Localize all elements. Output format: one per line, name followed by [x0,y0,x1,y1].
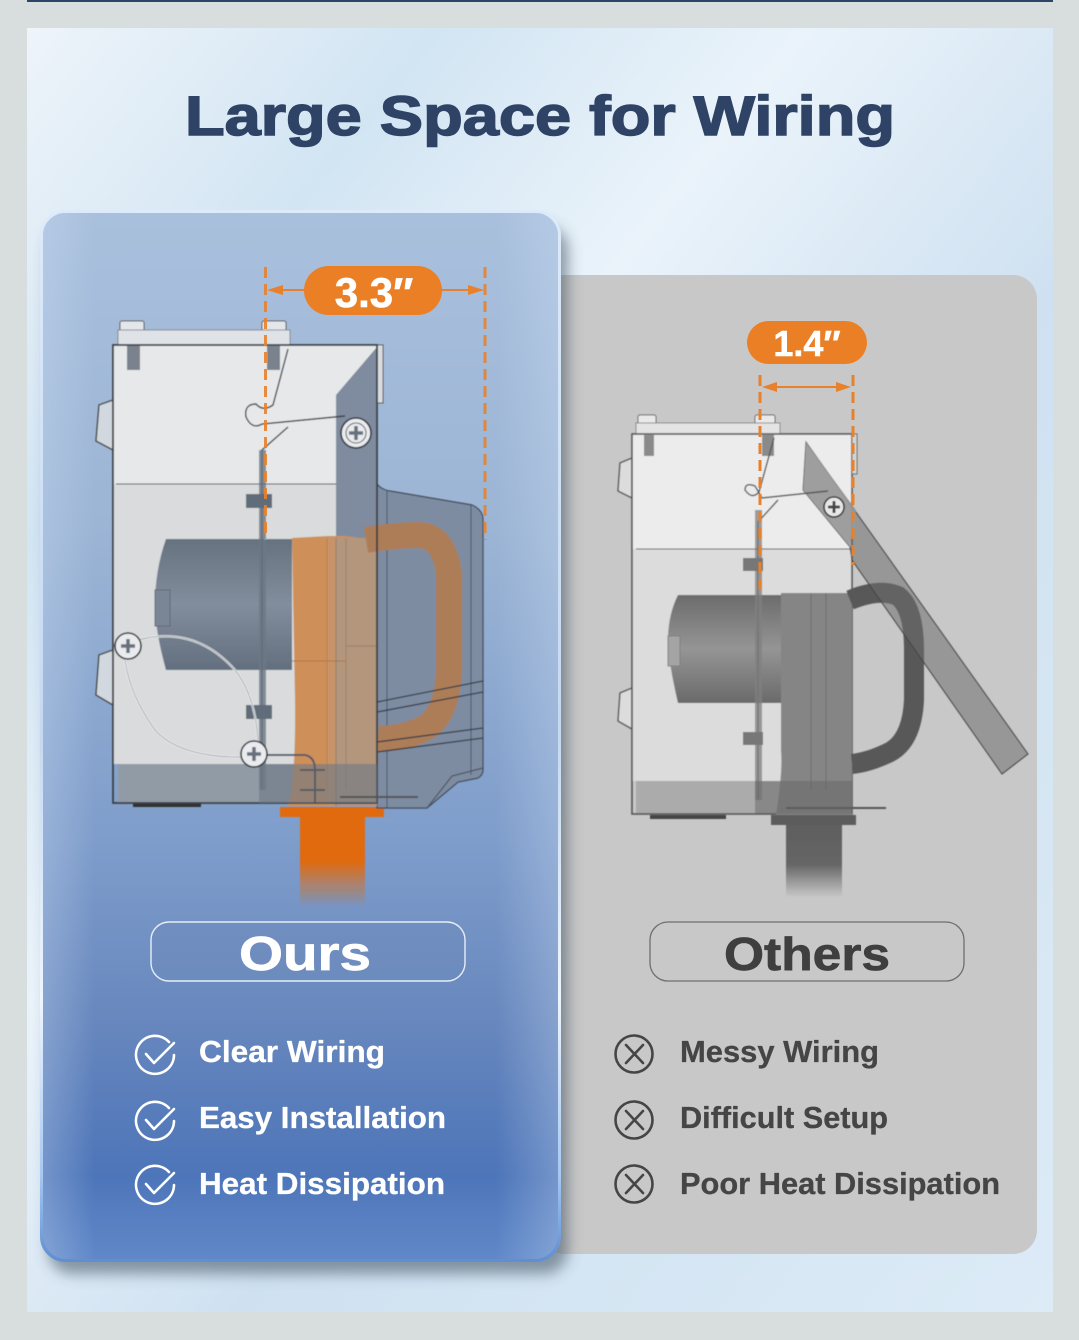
list: others drawbacks: Poor Heat Dissipation [680,1166,1000,1201]
label: others: Others [724,928,890,980]
list: ours benefits [136,1034,446,1204]
dimension: 3.3 inch [266,266,485,540]
dimension: 1.4 inch: 1.4″ [773,323,841,364]
list: others drawbacks: Messy Wiring [680,1034,879,1069]
label: others [650,922,964,981]
cord [300,815,365,907]
dimension: 1.4 inch [747,321,867,595]
ground wire [125,636,258,757]
spring wire [246,349,345,790]
list: ours benefits: Easy Installation [199,1100,446,1135]
label: ours: Ours [239,928,371,981]
panel: ours [42,212,568,1274]
diagram: ours enclosure [96,321,483,907]
handle [366,535,449,738]
door [803,442,1028,774]
label: ours [151,922,465,981]
screw [824,497,844,517]
diagram: others enclosure [618,415,1028,897]
list: others drawbacks: Difficult Setup [680,1100,888,1135]
plug body [776,593,852,815]
cylinder [668,595,781,703]
hood [377,484,483,808]
box outline [113,345,377,803]
list: ours benefits: Heat Dissipation [199,1166,445,1201]
cord [786,825,842,897]
list: others drawbacks [616,1034,1000,1202]
title: Large Space for Wiring [185,84,895,147]
dimension: 3.3 inch: 3.3″ [335,269,413,316]
spring wire [745,438,828,800]
cylinder [155,539,292,670]
list: ours benefits: Clear Wiring [199,1034,385,1069]
screws [115,418,371,767]
panel: others [540,275,1037,1254]
handle [850,593,914,764]
door upper [336,347,377,540]
plug body [288,536,377,806]
top border line [27,0,1053,2]
